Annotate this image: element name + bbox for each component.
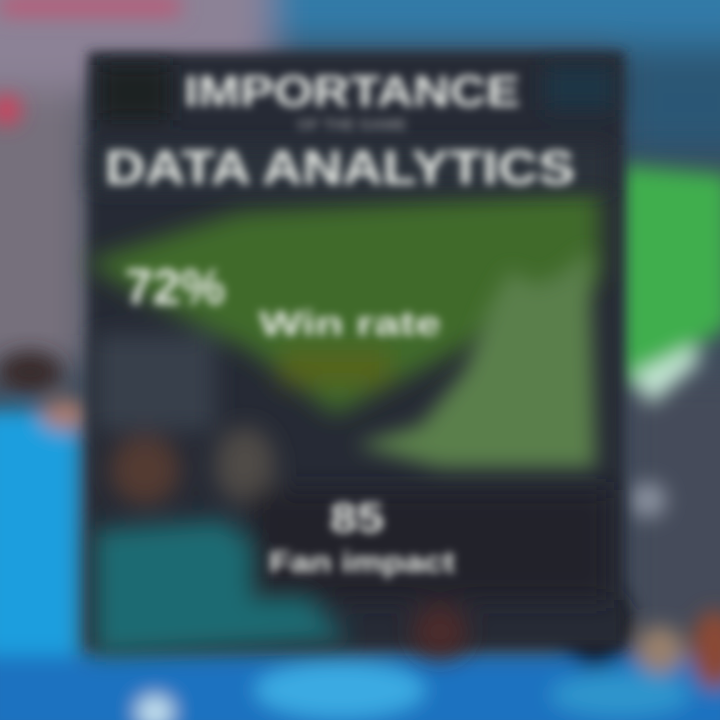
stat label: Win rate bbox=[259, 305, 441, 343]
title line 2: DATA ANALYTICS bbox=[105, 142, 575, 195]
bottom stat bbox=[269, 494, 455, 579]
bottom number: 85 bbox=[330, 494, 384, 541]
title bbox=[105, 67, 575, 195]
bottom caption: Fan impact bbox=[269, 546, 455, 579]
dark translucent panel bbox=[85, 52, 624, 658]
stat: percentage: 72% bbox=[125, 259, 225, 315]
title line 1: IMPORTANCE bbox=[184, 67, 520, 116]
area chart bbox=[355, 250, 596, 468]
field inside the panel bbox=[85, 190, 600, 415]
title connector: OF THE GAME bbox=[297, 117, 407, 134]
